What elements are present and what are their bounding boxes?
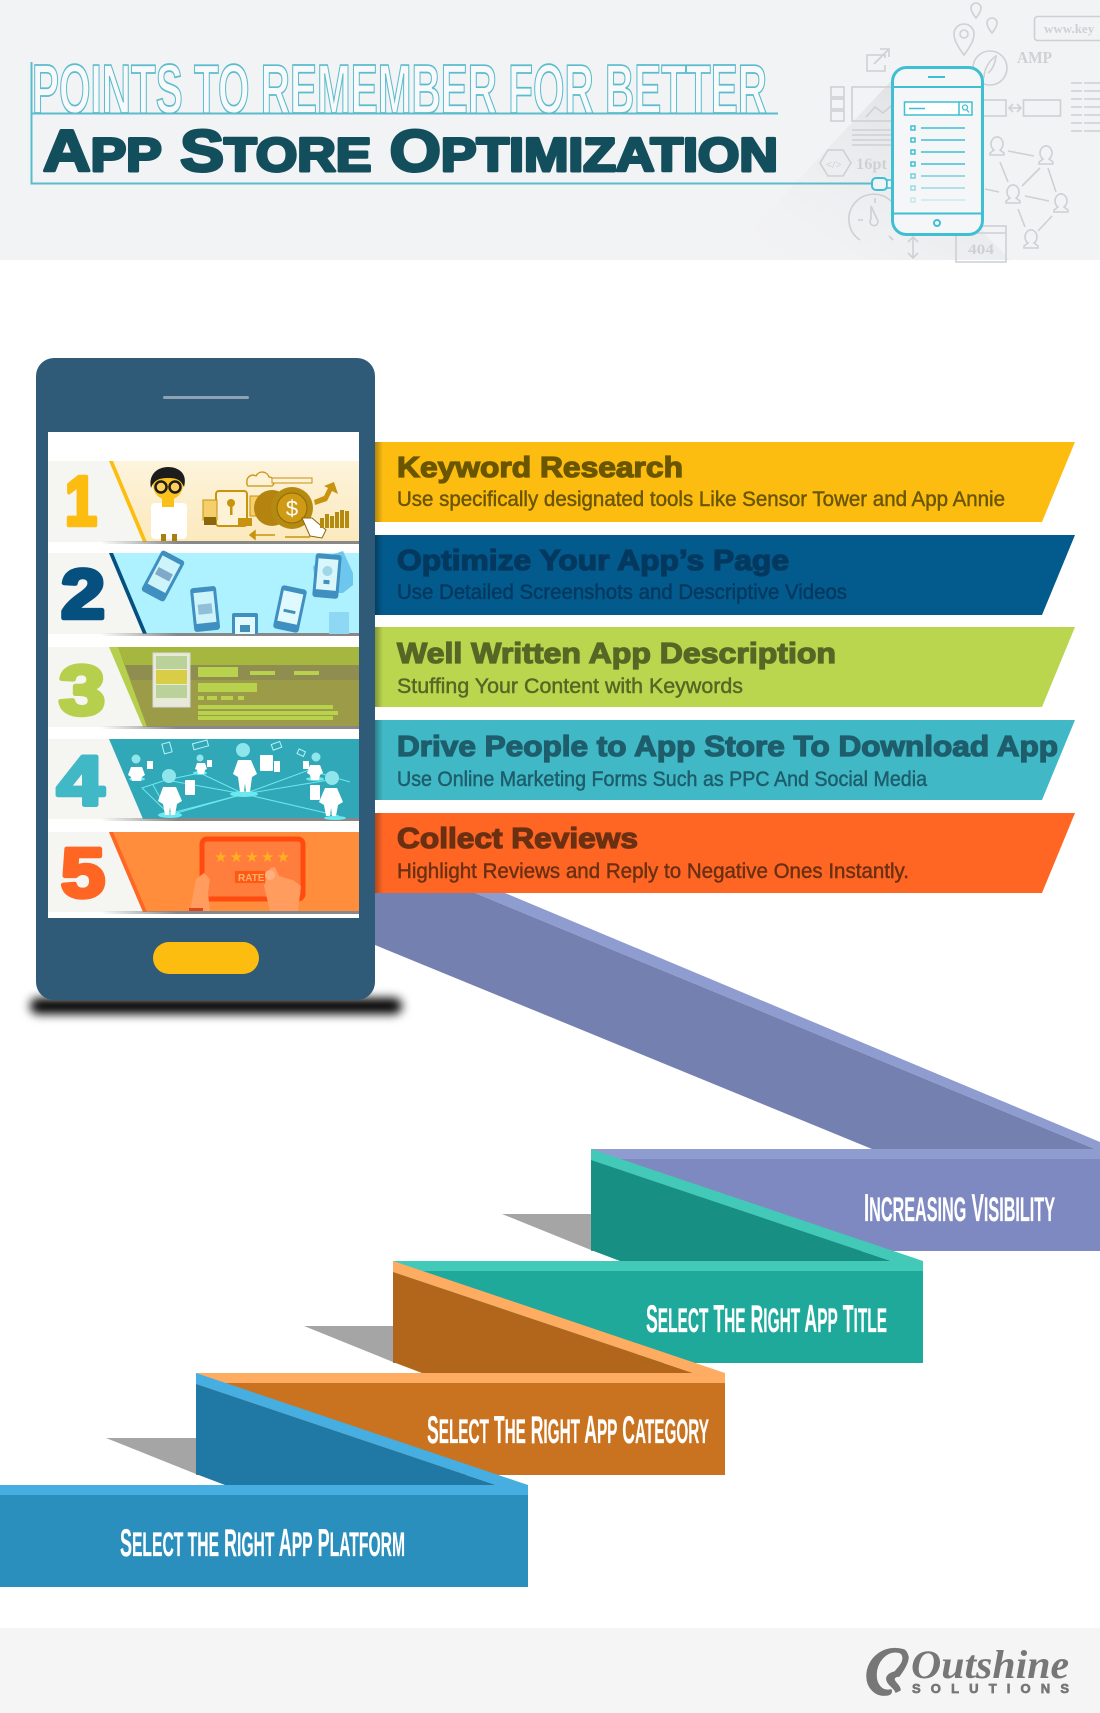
ribbon 4 heading: Drive People to App Store To Download App bbox=[397, 731, 1058, 763]
ribbon 1 bbox=[375, 442, 1075, 522]
title frame bbox=[31, 62, 873, 184]
background line icons: www.key bbox=[1044, 21, 1095, 36]
ribbon 2 bbox=[375, 535, 1075, 615]
number 1: 1 bbox=[65, 462, 97, 540]
row 3 bbox=[48, 647, 359, 729]
ribbon 2 text: Use Detailed Screenshots and Descriptive Videos bbox=[397, 581, 847, 604]
ribbon 1 heading: Keyword Research bbox=[397, 452, 683, 484]
number 4: 4 bbox=[57, 742, 104, 820]
shadow: orange wedge bbox=[304, 1326, 393, 1362]
row 5 bbox=[48, 832, 359, 914]
ribbon 2 heading: Optimize Your App’s Page bbox=[397, 545, 789, 577]
footer panel bbox=[0, 1628, 1100, 1713]
shadow: blue wedge bbox=[106, 1438, 196, 1474]
logo: Outshine Solutions bbox=[867, 1642, 1069, 1696]
header panel bbox=[0, 0, 1100, 262]
ribbon 5 heading: Collect Reviews bbox=[397, 823, 638, 855]
ribbon 5 text: Highlight Reviews and Reply to Negative Ones Instantly. bbox=[397, 860, 909, 883]
number 2: 2 bbox=[61, 555, 105, 633]
ribbon 1 text: Use specifically designated tools Like Sensor Tower and App Annie bbox=[397, 488, 1005, 511]
phone speaker bbox=[163, 396, 249, 399]
title line 2: APP STORE OPTIMIZATION bbox=[43, 119, 778, 184]
icon: header phone bbox=[872, 68, 982, 234]
row 2 bbox=[48, 550, 359, 636]
background line icons: AMP bbox=[1017, 48, 1052, 67]
step 1 label: SELECT THE RIGHT APP PLATFORM bbox=[120, 1522, 405, 1565]
illustration: man and gold coin bbox=[150, 467, 349, 541]
ribbon 3 heading: Well Written App Description bbox=[397, 638, 836, 670]
ribbon 5 bbox=[375, 813, 1075, 893]
phone home button bbox=[153, 942, 259, 974]
step 2 label: SELECT THE RIGHT APP CATEGORY bbox=[427, 1409, 709, 1452]
background line icons bbox=[820, 3, 1100, 262]
number 5: 5 bbox=[61, 834, 105, 912]
number 3: 3 bbox=[59, 651, 105, 729]
phone shadow bbox=[30, 998, 402, 1014]
ribbon 4 text: Use Online Marketing Forms Such as PPC And Social Media bbox=[397, 768, 927, 791]
row 4 bbox=[48, 739, 359, 821]
row 1 bbox=[48, 461, 359, 544]
illustration: tablet rating bbox=[189, 839, 303, 911]
illustration: tablet rating: RATE bbox=[238, 873, 265, 884]
ribbon 4 bbox=[375, 720, 1075, 800]
long purple ramp bbox=[375, 893, 1100, 1149]
ribbon 3 bbox=[375, 627, 1075, 707]
shadow: teal wedge bbox=[502, 1214, 591, 1250]
step 2: app category bbox=[196, 1261, 725, 1475]
logo: Outshine Solutions: SOLUTIONS bbox=[912, 1681, 1069, 1696]
phone body bbox=[36, 358, 375, 1000]
illustration: network of people bbox=[128, 740, 350, 820]
illustration: app description page bbox=[153, 653, 338, 720]
background line icons: 16pt bbox=[856, 156, 888, 173]
ribbon 3 text: Stuffing Your Content with Keywords bbox=[397, 675, 743, 698]
illustration: tablet rating: ★★★★★ bbox=[214, 849, 290, 866]
step 3: app title bbox=[393, 1149, 923, 1363]
step 1: app platform bbox=[0, 1373, 528, 1587]
illustration: man and gold coin: $ bbox=[286, 496, 298, 521]
step 4: increasing visibility bbox=[591, 1149, 1100, 1251]
background line icons: 404 bbox=[968, 242, 995, 258]
logo: Outshine Solutions: Outshine bbox=[911, 1642, 1069, 1687]
step 3 label: SELECT THE RIGHT APP TITLE bbox=[646, 1298, 887, 1341]
illustration: phones bbox=[141, 550, 353, 634]
background line icons: </> bbox=[826, 159, 842, 171]
